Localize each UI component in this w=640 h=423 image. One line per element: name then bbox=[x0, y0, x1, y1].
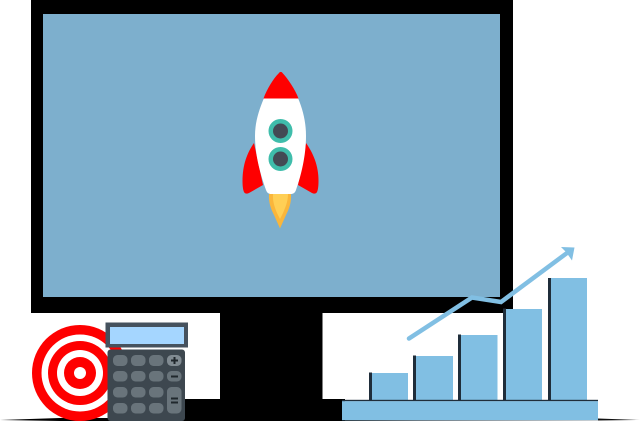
rocket body bbox=[255, 98, 306, 194]
ground shadow right bbox=[598, 418, 640, 420]
ground shadow left bbox=[0, 418, 345, 421]
left fin bbox=[242, 143, 263, 194]
bar 5 bbox=[548, 278, 587, 400]
monitor base bbox=[170, 399, 345, 421]
calculator buttons bbox=[113, 355, 182, 414]
monitor bbox=[31, 0, 513, 421]
rocket bbox=[242, 72, 318, 228]
chart baseline bbox=[342, 400, 598, 401]
calculator display bbox=[106, 322, 188, 348]
upper window bbox=[268, 119, 292, 143]
bar 2 bbox=[413, 356, 453, 400]
bar 3 bbox=[458, 334, 498, 400]
chart base bbox=[342, 401, 598, 420]
bar 1 bbox=[369, 372, 408, 400]
monitor screen bbox=[43, 14, 500, 297]
target bbox=[32, 325, 128, 421]
calculator body bbox=[108, 350, 185, 421]
arrow bbox=[409, 247, 574, 338]
right fin bbox=[298, 143, 318, 194]
flame bbox=[269, 194, 291, 228]
calculator symbols bbox=[171, 357, 178, 404]
calculator bbox=[106, 322, 188, 421]
bar chart bbox=[342, 278, 598, 421]
bar 4 bbox=[503, 308, 542, 400]
monitor frame bbox=[31, 0, 513, 313]
monitor stand bbox=[220, 313, 322, 400]
nose cone bbox=[264, 72, 298, 98]
flame inner bbox=[273, 194, 288, 219]
lower window bbox=[268, 147, 292, 171]
chart base shadow bbox=[342, 419, 598, 422]
